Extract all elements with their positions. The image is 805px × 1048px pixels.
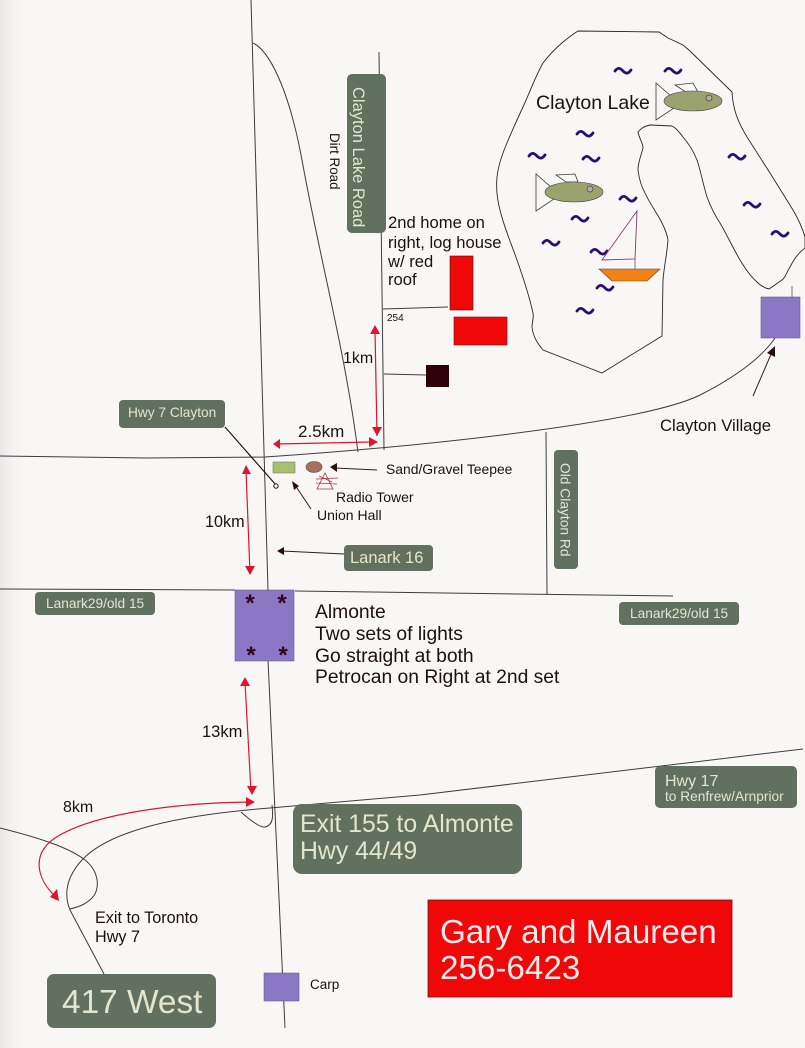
Almonte square with lights: * bbox=[245, 590, 255, 617]
sign: Exit 155: Exit 155 to Almonte bbox=[300, 811, 514, 838]
lake label: Clayton Lake bbox=[536, 92, 650, 114]
Radio Tower: Radio Tower bbox=[336, 489, 414, 505]
13km arrow: 13km bbox=[202, 723, 242, 741]
contact box: 256-6423 bbox=[440, 950, 580, 987]
Union Hall bbox=[273, 462, 382, 523]
Almonte directions: Almonte bbox=[315, 602, 386, 623]
8km curved arrow bbox=[39, 797, 255, 901]
sign: Old Clayton Rd bbox=[554, 450, 578, 569]
Almonte directions bbox=[315, 602, 560, 688]
sign: Hwy 17 bbox=[655, 766, 797, 808]
label: Exit to Toronto: Hwy 7 bbox=[95, 928, 140, 946]
label: Dirt Road: Dirt Road bbox=[327, 133, 342, 190]
contact box: Gary and Maureen bbox=[440, 914, 717, 951]
Sand/Gravel Teepee bbox=[306, 461, 513, 477]
10km arrow: 10km bbox=[205, 513, 245, 531]
Sand/Gravel Teepee: Sand/Gravel Teepee bbox=[386, 461, 513, 477]
Almonte square with lights: * bbox=[278, 642, 288, 669]
icon: fish bottom bbox=[536, 174, 603, 211]
Clayton Village label and arrow: Clayton Village bbox=[660, 416, 771, 435]
2.5km arrow bbox=[273, 422, 378, 449]
Carp marker bbox=[264, 973, 339, 1001]
directions note: right, log house bbox=[388, 233, 501, 252]
label: Exit to Toronto bbox=[95, 909, 198, 946]
directions note: roof bbox=[388, 270, 417, 289]
sign: Clayton Lake Road: Clayton Lake Road bbox=[349, 87, 367, 227]
Almonte square with lights: * bbox=[246, 642, 256, 669]
Radio Tower bbox=[316, 473, 414, 505]
directions note: w/ red bbox=[387, 252, 433, 271]
Carp marker: Carp bbox=[310, 977, 339, 992]
sign: Hwy 7 Clayton bbox=[119, 400, 278, 488]
icon: sailboat bbox=[599, 211, 660, 281]
sign: Exit 155 bbox=[293, 804, 522, 874]
sign: Lanark 16 bbox=[277, 545, 433, 571]
directions note: 2nd home on bbox=[388, 213, 485, 232]
sign: Lanark29 east: Lanark29/old 15 bbox=[630, 606, 729, 621]
lake outline bbox=[497, 31, 805, 373]
sign: Clayton Lake Road bbox=[347, 74, 386, 233]
sign: Lanark29 west bbox=[35, 592, 155, 615]
sign: Hwy 7 Clayton: Hwy 7 Clayton bbox=[128, 405, 216, 420]
contact box bbox=[428, 900, 732, 997]
sign: 417 West: 417 West bbox=[62, 984, 203, 1021]
water ripples bbox=[529, 68, 788, 313]
Almonte directions: Two sets of lights bbox=[315, 624, 463, 645]
8km curved arrow: 8km bbox=[63, 799, 93, 816]
1km arrow bbox=[343, 325, 382, 436]
sign: Lanark29 west: Lanark29/old 15 bbox=[46, 596, 145, 611]
Almonte square with lights bbox=[235, 590, 294, 669]
sign: Old Clayton Rd: Old Clayton Rd bbox=[558, 463, 572, 557]
Almonte directions: Go straight at both bbox=[315, 646, 474, 667]
house number: 254 bbox=[387, 313, 404, 324]
sign: Lanark29 east bbox=[619, 602, 739, 625]
10km arrow bbox=[205, 465, 255, 575]
Clayton Village label and arrow bbox=[660, 346, 775, 435]
sign: Lanark 16: Lanark 16 bbox=[350, 549, 423, 567]
sign: Exit 155: Hwy 44/49 bbox=[300, 838, 417, 865]
label: Exit to Toronto: Exit to Toronto bbox=[95, 909, 198, 927]
icon: Clayton Village square bbox=[761, 286, 800, 338]
13km arrow bbox=[202, 677, 257, 795]
Union Hall: Union Hall bbox=[317, 507, 382, 523]
sign: 417 West bbox=[47, 974, 216, 1028]
sign: Hwy 17: Hwy 17 bbox=[665, 773, 718, 790]
2.5km arrow: 2.5km bbox=[298, 422, 344, 441]
Almonte square with lights: * bbox=[277, 590, 287, 617]
directions note bbox=[387, 213, 501, 289]
buildings bbox=[426, 256, 507, 387]
Almonte directions: Petrocan on Right at 2nd set bbox=[315, 667, 560, 688]
1km arrow: 1km bbox=[343, 350, 373, 367]
icon: fish top bbox=[656, 83, 722, 120]
sign: Hwy 17: to Renfrew/Arnprior bbox=[665, 789, 784, 804]
